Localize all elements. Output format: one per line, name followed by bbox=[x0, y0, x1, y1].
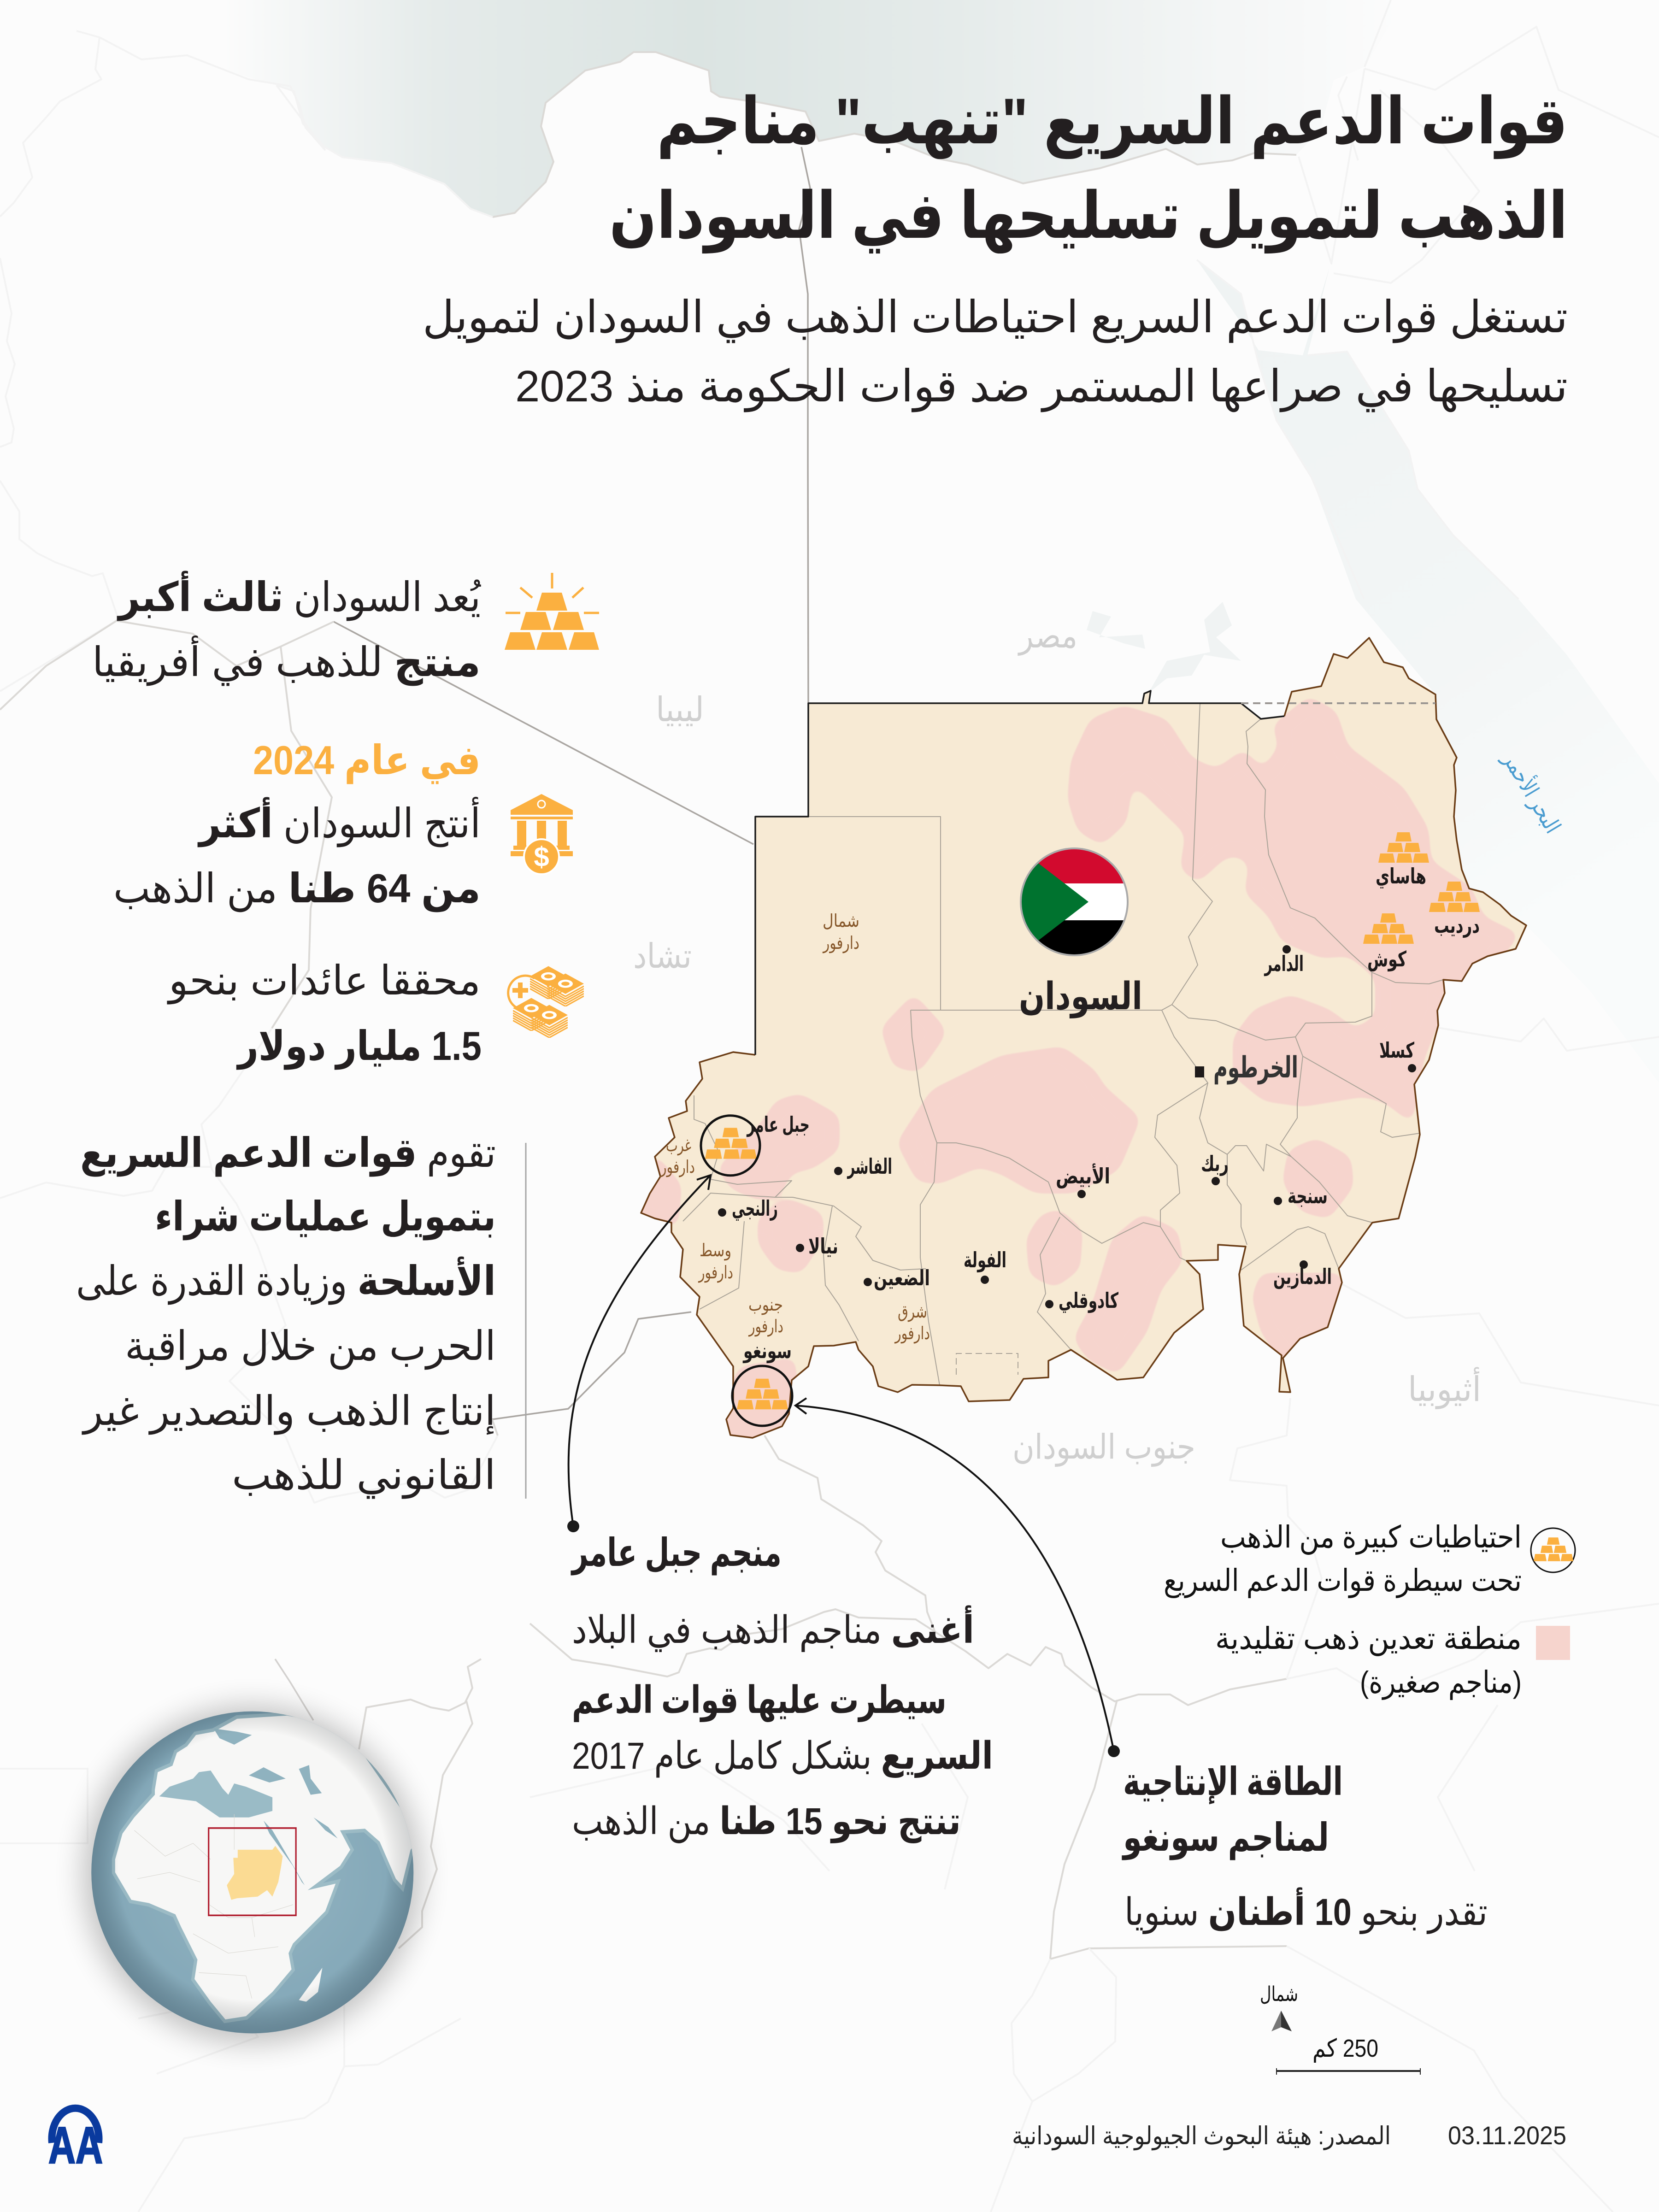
neighbouring country labels: مصر bbox=[1017, 617, 1077, 656]
map label: Sudan: السودان bbox=[1019, 976, 1142, 1018]
neighbouring country labels bbox=[633, 617, 1567, 1467]
city labels and dots: الضعين bbox=[874, 1266, 930, 1290]
city labels and dots: الفولة bbox=[964, 1248, 1006, 1272]
fact: 2024 production: في عام 2024 bbox=[253, 737, 481, 784]
callout: Songo mines: الطاقة الإنتاجية bbox=[1123, 1760, 1343, 1805]
title bbox=[609, 85, 1568, 254]
locator globe bbox=[84, 1706, 420, 2043]
region labels: دارفور bbox=[748, 1317, 783, 1337]
city labels and dots: كوش bbox=[1367, 947, 1406, 971]
city labels and dots: كادوقلي bbox=[1059, 1288, 1118, 1313]
city labels and dots: سونغو bbox=[743, 1339, 792, 1363]
region labels: دارفور bbox=[660, 1158, 695, 1177]
region labels: شرق bbox=[898, 1302, 927, 1322]
region labels bbox=[660, 912, 930, 1344]
region labels: وسط bbox=[700, 1241, 731, 1261]
callout: Jebel Amer mine bbox=[571, 1531, 993, 1843]
logo: Anadolu Agency: AA bbox=[48, 2117, 103, 2174]
RSF financing paragraph: الأسلحة وزيادة القدرة على bbox=[76, 1256, 496, 1305]
RSF financing paragraph: تقوم قوات الدعم السريع bbox=[80, 1130, 496, 1177]
region labels: دارفور bbox=[698, 1263, 733, 1283]
neighbouring country labels: تشاد bbox=[633, 937, 692, 975]
region labels: غرب bbox=[666, 1136, 691, 1156]
legend: احتياطيات كبيرة من الذهب bbox=[1220, 1520, 1522, 1555]
logo: Anadolu Agency bbox=[48, 2108, 103, 2174]
flag of Sudan bbox=[1018, 846, 1130, 958]
fact: third largest producer: يُعد السودان ثالث أكبر bbox=[117, 571, 481, 621]
arrow: Songo callout bbox=[795, 1398, 1120, 1757]
neighbouring country labels: ليبيا bbox=[656, 690, 704, 729]
gold reserve markers bbox=[705, 832, 1480, 1409]
fact: 2024 production bbox=[113, 737, 481, 912]
callout: Songo mines: تقدر بنحو 10 أطنان سنويا bbox=[1124, 1887, 1488, 1934]
city labels and dots: سنجة bbox=[1288, 1184, 1328, 1208]
neighbouring country labels: البحر الأحمر bbox=[1497, 747, 1567, 838]
fact: revenue bbox=[167, 958, 482, 1070]
Sudan territory fill bbox=[641, 638, 1526, 1438]
icon: gold bars with rays bbox=[505, 573, 599, 650]
arrow: Jebel Amer callout bbox=[567, 1175, 711, 1532]
fact: revenue: محققا عائدات بنحو bbox=[167, 958, 481, 1005]
city labels and dots: درديب bbox=[1434, 913, 1480, 938]
callout: Songo mines bbox=[1122, 1760, 1488, 1934]
region labels: دارفور bbox=[894, 1324, 930, 1344]
RSF financing paragraph bbox=[76, 1130, 496, 1499]
subtitle: تسليحها في صراعها المستمر ضد قوات الحكومة منذ 2023 bbox=[515, 362, 1568, 412]
callout: Jebel Amer mine: السريع بشكل كامل عام 2017 bbox=[572, 1735, 993, 1778]
scale bar: 250 كم bbox=[1312, 2035, 1378, 2063]
fact: third largest producer: منتج للذهب في أفريقيا bbox=[92, 635, 481, 686]
legend: منطقة تعدين ذهب تقليدية bbox=[1215, 1621, 1522, 1656]
city labels and dots: الدامر bbox=[1264, 952, 1304, 976]
fact: third largest producer bbox=[92, 571, 481, 686]
city labels and dots: زالنجي bbox=[732, 1196, 778, 1221]
callout: Jebel Amer mine: أغنى مناجم الذهب في البلاد bbox=[572, 1605, 974, 1652]
subtitle bbox=[423, 293, 1568, 412]
city labels and dots: الخرطوم bbox=[1213, 1051, 1298, 1085]
city labels and dots: ربك bbox=[1201, 1152, 1229, 1176]
RSF controlled mine circles bbox=[701, 1116, 792, 1426]
source: المصدر: هيئة البحوث الجيولوجية السودانية bbox=[1012, 2122, 1391, 2150]
icon: bank with dollar coin bbox=[511, 794, 573, 874]
city labels and dots: الأبيض bbox=[1056, 1163, 1110, 1188]
fact: 2024 production: من 64 طنا من الذهب bbox=[113, 865, 481, 912]
callout: Jebel Amer mine: سيطرت عليها قوات الدعم bbox=[572, 1679, 947, 1722]
city labels and dots bbox=[718, 864, 1480, 1363]
icon: bank with dollar coin: $ bbox=[534, 841, 549, 872]
icon: money stacks bbox=[508, 966, 584, 1038]
northern border bbox=[755, 691, 1284, 1055]
state boundaries bbox=[683, 703, 1443, 1385]
subtitle: تستغل قوات الدعم السريع احتياطات الذهب في السودان لتمويل bbox=[423, 293, 1568, 343]
Sudan outline bbox=[641, 638, 1526, 1438]
RSF financing paragraph: إنتاج الذهب والتصدير غير bbox=[82, 1388, 496, 1435]
traditional gold mining zones bbox=[631, 696, 1521, 1442]
neighbouring country labels: أثيوبيا bbox=[1408, 1367, 1481, 1409]
legend: تحت سيطرة قوات الدعم السريع bbox=[1164, 1563, 1522, 1598]
north arrow bbox=[1260, 1983, 1298, 2031]
fact: revenue: 1.5 مليار دولار bbox=[236, 1023, 482, 1070]
city labels and dots: كسلا bbox=[1379, 1038, 1414, 1062]
scale bar bbox=[1277, 2035, 1420, 2075]
RSF financing paragraph: القانوني للذهب bbox=[232, 1452, 496, 1499]
city labels and dots: جبل عامر bbox=[747, 1112, 810, 1137]
neighbouring country labels: جنوب السودان bbox=[1012, 1428, 1195, 1467]
region labels: شمال bbox=[823, 912, 859, 931]
fact: 2024 production: أنتج السودان أكثر bbox=[197, 797, 481, 847]
map: Sudan bbox=[631, 638, 1526, 1442]
city labels and dots: هاساي bbox=[1376, 864, 1426, 888]
legend: (مناجم صغيرة) bbox=[1360, 1665, 1522, 1700]
legend bbox=[1164, 1520, 1575, 1700]
callout: Jebel Amer mine: منجم جبل عامر bbox=[571, 1531, 782, 1576]
north arrow: شمال bbox=[1260, 1983, 1298, 2006]
city labels and dots: الفاشر bbox=[847, 1154, 892, 1179]
RSF financing paragraph: الحرب من خلال مراقبة bbox=[125, 1323, 496, 1370]
city labels and dots: نيالا bbox=[808, 1234, 838, 1258]
callout: Jebel Amer mine: تنتج نحو 15 طنا من الذهب bbox=[572, 1800, 961, 1843]
callout: Songo mines: لمناجم سونغو bbox=[1122, 1816, 1329, 1860]
region labels: جنوب bbox=[748, 1295, 783, 1315]
city labels and dots: الدمازين bbox=[1273, 1265, 1332, 1289]
RSF financing paragraph: بتمويل عمليات شراء bbox=[155, 1194, 496, 1241]
date: 03.11.2025 bbox=[1448, 2121, 1566, 2150]
region labels: دارفور bbox=[822, 934, 859, 953]
